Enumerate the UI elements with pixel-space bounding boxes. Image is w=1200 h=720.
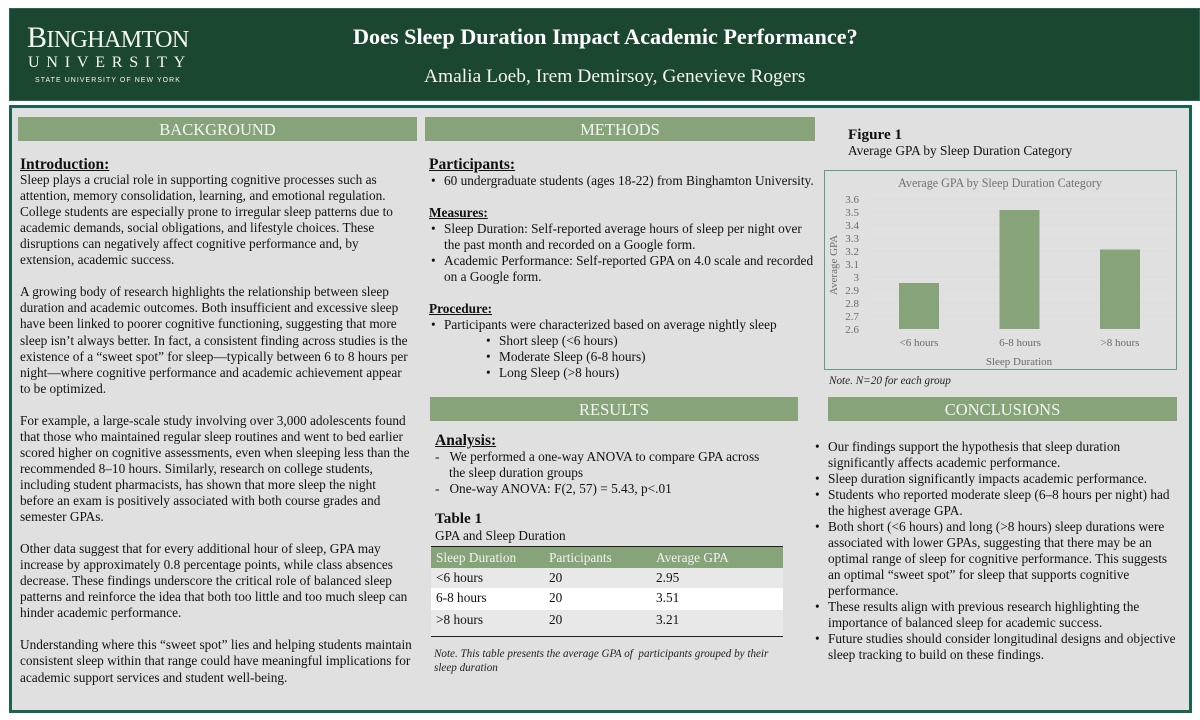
measures list: on a Google form.	[444, 269, 542, 284]
conclusions list: Students who reported moderate sleep (6–8 hours per night) had	[828, 487, 1170, 502]
text block: introduction: hinder academic performance.	[20, 605, 181, 620]
heading: background	[18, 117, 417, 141]
x axis labels: <6 hours	[900, 337, 938, 349]
table heading: GPA and Sleep Duration	[435, 528, 566, 543]
text block: introduction: have been linked to poorer cognitive functioning, suggesting that more	[20, 316, 397, 331]
text block: introduction: scored higher on cognitive assessments, even when sleeping less than the	[20, 445, 410, 460]
conclusions list: optimal range of sleep for cognitive performance. This suggests	[828, 551, 1167, 566]
conclusions list: •	[815, 599, 820, 614]
conclusions list: an optimal “sweet spot” for sleep that supports cognitive	[828, 567, 1129, 582]
y axis labels	[845, 194, 860, 336]
analysis list: - We performed a one-way ANOVA to compare GPA across	[435, 449, 759, 464]
row: 6-8 hours: 6-8 hours	[436, 590, 487, 605]
header banner	[9, 8, 1200, 101]
y axis title: Average GPA	[828, 235, 840, 295]
text block: analysis	[435, 432, 759, 496]
conclusions list: importance of balanced sleep for academic success.	[828, 615, 1102, 630]
y axis labels: 2.8	[845, 298, 860, 310]
conclusions list: sleep tracking to build on these findings.	[828, 647, 1044, 662]
text block: introduction: sleep isn’t always better. In fact, a consistent finding across studies is the	[20, 333, 408, 348]
conclusions list: performance.	[828, 583, 899, 598]
x axis labels: Sleep Duration	[986, 356, 1053, 368]
logo: Binghamton University wordmark: BINGHAMTON	[27, 21, 189, 54]
text block: introduction: attention, memory consolidation, learning, and emotional regulation.	[20, 188, 386, 203]
poster title: Does Sleep Duration Impact Academic Performance?	[353, 24, 858, 49]
y axis labels: 3.1	[845, 259, 859, 271]
participants list: 60 undergraduate students (ages 18-22) from Binghamton University.	[444, 173, 814, 188]
conclusions list: Both short (<6 hours) and long (>8 hours) sleep durations were	[828, 519, 1164, 534]
conclusions list: Sleep duration significantly impacts academic performance.	[828, 471, 1147, 486]
conclusions list: associated with lower GPAs, suggesting that there may be an	[828, 535, 1152, 550]
conclusions list: Future studies should consider longitudinal designs and objective	[828, 631, 1176, 646]
text block: introduction: recommended 8–10 hours. Similarly, research on college students,	[20, 461, 373, 476]
procedure list: •	[486, 349, 491, 364]
procedure list: Participants were characterized based on average nightly sleep	[444, 317, 777, 332]
text block: introduction: academic demands, social obligations, and lifestyle choices. These	[20, 220, 374, 235]
heading: results: RESULTS	[579, 400, 649, 419]
text block: introduction: increase by approximately 0.8 percentage points, while class absences	[20, 557, 393, 572]
text block: introduction: including student pharmacists, has shown that more sleep the night	[20, 477, 376, 492]
conclusions list: •	[815, 471, 820, 486]
text block: introduction: Introduction:	[20, 156, 109, 173]
conclusions list: the highest average GPA.	[828, 503, 963, 518]
procedure list: •	[486, 365, 491, 380]
bar chart: Average GPA by Sleep Duration Category	[898, 176, 1102, 190]
table note: sleep duration	[434, 662, 498, 674]
heading: conclusions	[828, 397, 1177, 421]
bars	[899, 210, 1140, 329]
table header row: Sleep Duration	[436, 550, 516, 565]
y axis labels: 3.5	[845, 207, 860, 219]
row: over 8 hours: 20	[549, 612, 562, 627]
measures list: Sleep Duration: Self-reported average hours of sleep per night over	[444, 221, 802, 236]
row: under 6 hours: 2.95	[656, 570, 679, 585]
conclusions list: •	[815, 519, 820, 534]
measures list: •	[431, 221, 436, 236]
heading: background: BACKGROUND	[159, 120, 276, 139]
measures list	[431, 221, 813, 284]
authors: Amalia Loeb, Irem Demirsoy, Genevieve Rogers	[424, 66, 805, 87]
x axis labels	[900, 337, 1139, 368]
heading: results	[430, 397, 798, 421]
y axis labels: 3.3	[845, 233, 860, 245]
figure note: Note. N=20 for each group	[829, 375, 951, 387]
text block: introduction: that those who maintained regular sleep routines and went to bed earlier	[20, 429, 403, 444]
analysis list	[435, 449, 759, 496]
figure heading: Average GPA by Sleep Duration Category	[848, 143, 1072, 158]
y axis labels: 3.4	[845, 220, 860, 232]
participants list: •	[431, 173, 436, 188]
logo: Binghamton University wordmark	[27, 21, 192, 84]
bar chart	[824, 170, 1177, 370]
x axis labels: 6-8 hours	[999, 337, 1041, 349]
text block: introduction: Other data suggest that for every additional hour of sleep, GPA may	[20, 541, 381, 556]
text block: introduction: before an exam is positively associated with both course grades and	[20, 493, 380, 508]
measures list: Academic Performance: Self-reported GPA on 4.0 scale and recorded	[444, 253, 813, 268]
procedure list: •	[431, 317, 436, 332]
y axis labels: 2.9	[845, 285, 860, 297]
participants heading: Participants:	[429, 156, 515, 173]
text block: introduction: Sleep plays a crucial role in supporting cognitive processes such as	[20, 172, 377, 187]
conclusions list: significantly affects academic performance.	[828, 455, 1060, 470]
procedure list: Short sleep (<6 hours)	[499, 333, 618, 348]
row: under 6 hours	[436, 570, 679, 585]
table header row: Participants	[549, 550, 612, 565]
y axis labels: 3.6	[845, 194, 860, 206]
measures list: •	[431, 253, 436, 268]
heading: conclusions: CONCLUSIONS	[945, 400, 1060, 419]
y axis labels: 2.6	[845, 324, 860, 336]
text block: introduction: decrease. These findings underscore the critical role of balanced sleep	[20, 573, 392, 588]
row: 6-8 hours: 20	[549, 590, 562, 605]
analysis list: the sleep duration groups	[449, 465, 583, 480]
row: under 6 hours: <6 hours	[436, 570, 483, 585]
text block: introduction: consistent sleep within that range could have meaningful implications for	[20, 653, 410, 668]
row: over 8 hours	[436, 612, 679, 627]
x axis labels: >8 hours	[1101, 337, 1139, 349]
table note: Note. This table presents the average GPA of participants grouped by their	[434, 648, 768, 660]
procedure heading: Procedure:	[429, 301, 492, 316]
row: 6-8 hours	[431, 588, 783, 610]
text block: introduction: to be optimized.	[20, 381, 106, 396]
analysis list: - One-way ANOVA: F(2, 57) = 5.43, p<.01	[435, 481, 672, 496]
text block: introduction: duration and academic outcomes. Both insufficient and excessive sleep	[20, 300, 398, 315]
text block: introduction: Understanding where this “sweet spot” lies and helping students maintain	[20, 637, 412, 652]
text block: introduction: College students are especially prone to irregular sleep patterns due to	[20, 204, 393, 219]
table header row	[431, 547, 783, 568]
table heading	[435, 510, 566, 543]
table 1	[431, 546, 783, 637]
text block: introduction	[20, 156, 412, 685]
heading: methods	[425, 117, 815, 141]
text block: introduction: disruptions can negatively affect cognitive performance and, by	[20, 236, 359, 251]
procedure list: Long Sleep (>8 hours)	[499, 365, 619, 380]
conclusions list	[815, 439, 1176, 662]
procedure list	[431, 317, 777, 380]
measures heading: Measures:	[429, 205, 488, 220]
table header row: Average GPA	[656, 550, 729, 565]
text block: introduction: night—where cognitive performance and academic achievement appear	[20, 365, 402, 380]
table note	[434, 648, 768, 674]
text block: introduction: academic support services and student well-being.	[20, 670, 287, 684]
logo: Binghamton University wordmark: STATE UNIVERSITY OF NEW YORK	[35, 77, 181, 84]
row: over 8 hours: >8 hours	[436, 612, 483, 627]
text block: introduction: existence of a “sweet spot” for sleep—typically between 6 to 8 hours per	[20, 349, 408, 364]
conclusions list: Our findings support the hypothesis that sleep duration	[828, 439, 1120, 454]
row: 6-8 hours: 3.51	[656, 590, 679, 605]
procedure list: Moderate Sleep (6-8 hours)	[499, 349, 646, 364]
text block: methods	[429, 156, 814, 380]
text block: introduction: For example, a large-scale study involving over 3,000 adolescents found	[20, 413, 406, 428]
y axis labels: 3	[854, 272, 860, 284]
text block: introduction: A growing body of research highlights the relationship between sleep	[20, 284, 389, 299]
y axis labels: 2.7	[845, 311, 860, 323]
analysis heading: Analysis:	[435, 432, 496, 449]
conclusions list: •	[815, 631, 820, 646]
table heading: Table 1	[435, 510, 482, 527]
conclusions list: •	[815, 439, 820, 454]
y axis labels: 3.2	[845, 246, 859, 258]
text block: introduction: semester GPAs.	[20, 509, 104, 524]
figure heading	[848, 126, 1072, 158]
row: over 8 hours: 3.21	[656, 612, 679, 627]
figure heading: Figure 1	[848, 126, 902, 143]
procedure list: •	[486, 333, 491, 348]
measures list: the past month and recorded on a Google form.	[444, 237, 695, 252]
conclusions list: These results align with previous research highlighting the	[828, 599, 1139, 614]
logo: Binghamton University wordmark: UNIVERSITY	[28, 54, 192, 71]
conclusions list: •	[815, 487, 820, 502]
heading: methods: METHODS	[580, 120, 660, 139]
text block: introduction: patterns and reinforce the idea that both too little and too much sleep can	[20, 589, 407, 604]
row: under 6 hours: 20	[549, 570, 562, 585]
text block: introduction: extension, academic success.	[20, 252, 174, 267]
